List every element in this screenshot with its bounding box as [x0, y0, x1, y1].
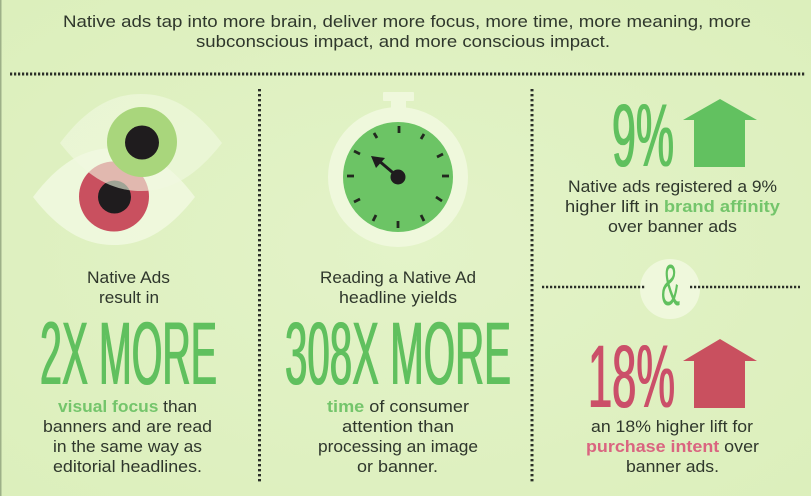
text: reading a native ad: headline yields — [339, 289, 457, 307]
text: purchase intent description — [586, 418, 760, 476]
infographic canvas: 2X MORE — [40, 303, 217, 403]
icon: stopwatch — [328, 92, 468, 247]
icon: green up arrow — [683, 99, 757, 167]
text: visual focus description: visual focus than — [58, 398, 197, 416]
ampersand divider: & — [661, 253, 680, 318]
panel: brand affinity — [565, 85, 781, 236]
header text — [63, 13, 751, 51]
panel: brand affinity: 9% — [612, 85, 674, 185]
text: reading a native ad: Reading a Native Ad — [320, 269, 476, 287]
text: time description: or banner. — [357, 458, 438, 476]
text: native ads result in — [87, 269, 170, 307]
text: time description — [318, 398, 478, 476]
text: brand affinity description: over banner ads — [608, 218, 737, 236]
ampersand divider — [542, 253, 800, 319]
text: purchase intent description: an 18% higher lift for — [591, 418, 754, 436]
icon: red up arrow — [683, 339, 757, 408]
icon: overlapping eyes — [33, 94, 222, 245]
panel: purchase intent: 18% — [588, 326, 675, 426]
text: brand affinity description: higher lift in brand affinity — [565, 198, 781, 216]
infographic canvas: 308X MORE — [285, 303, 511, 403]
text: time description: processing an image — [318, 438, 478, 456]
text: native ads result in: result in — [99, 289, 159, 307]
text: visual focus description: in the same way as — [53, 438, 202, 456]
panel: visual focus — [33, 94, 222, 476]
text: native ads result in: Native Ads — [87, 269, 170, 287]
text: visual focus description: banners and are read — [43, 418, 212, 436]
text: brand affinity description — [565, 178, 781, 236]
text: reading a native ad — [320, 269, 476, 307]
text: brand affinity description: Native ads registered a 9% — [568, 178, 777, 196]
text: purchase intent description: banner ads. — [626, 458, 719, 476]
panel: purchase intent — [586, 326, 760, 476]
header text: Native ads tap into more brain, deliver more focus, more time, more meaning, more — [63, 13, 751, 31]
text: time description: time of consumer — [327, 398, 470, 416]
text: visual focus description — [43, 398, 212, 476]
text: visual focus description: editorial headlines. — [53, 458, 202, 476]
header text: subconscious impact, and more conscious impact. — [196, 33, 610, 51]
text: time description: attention than — [342, 418, 454, 436]
text: purchase intent description: purchase intent over — [586, 438, 760, 456]
panel: time — [285, 92, 511, 476]
